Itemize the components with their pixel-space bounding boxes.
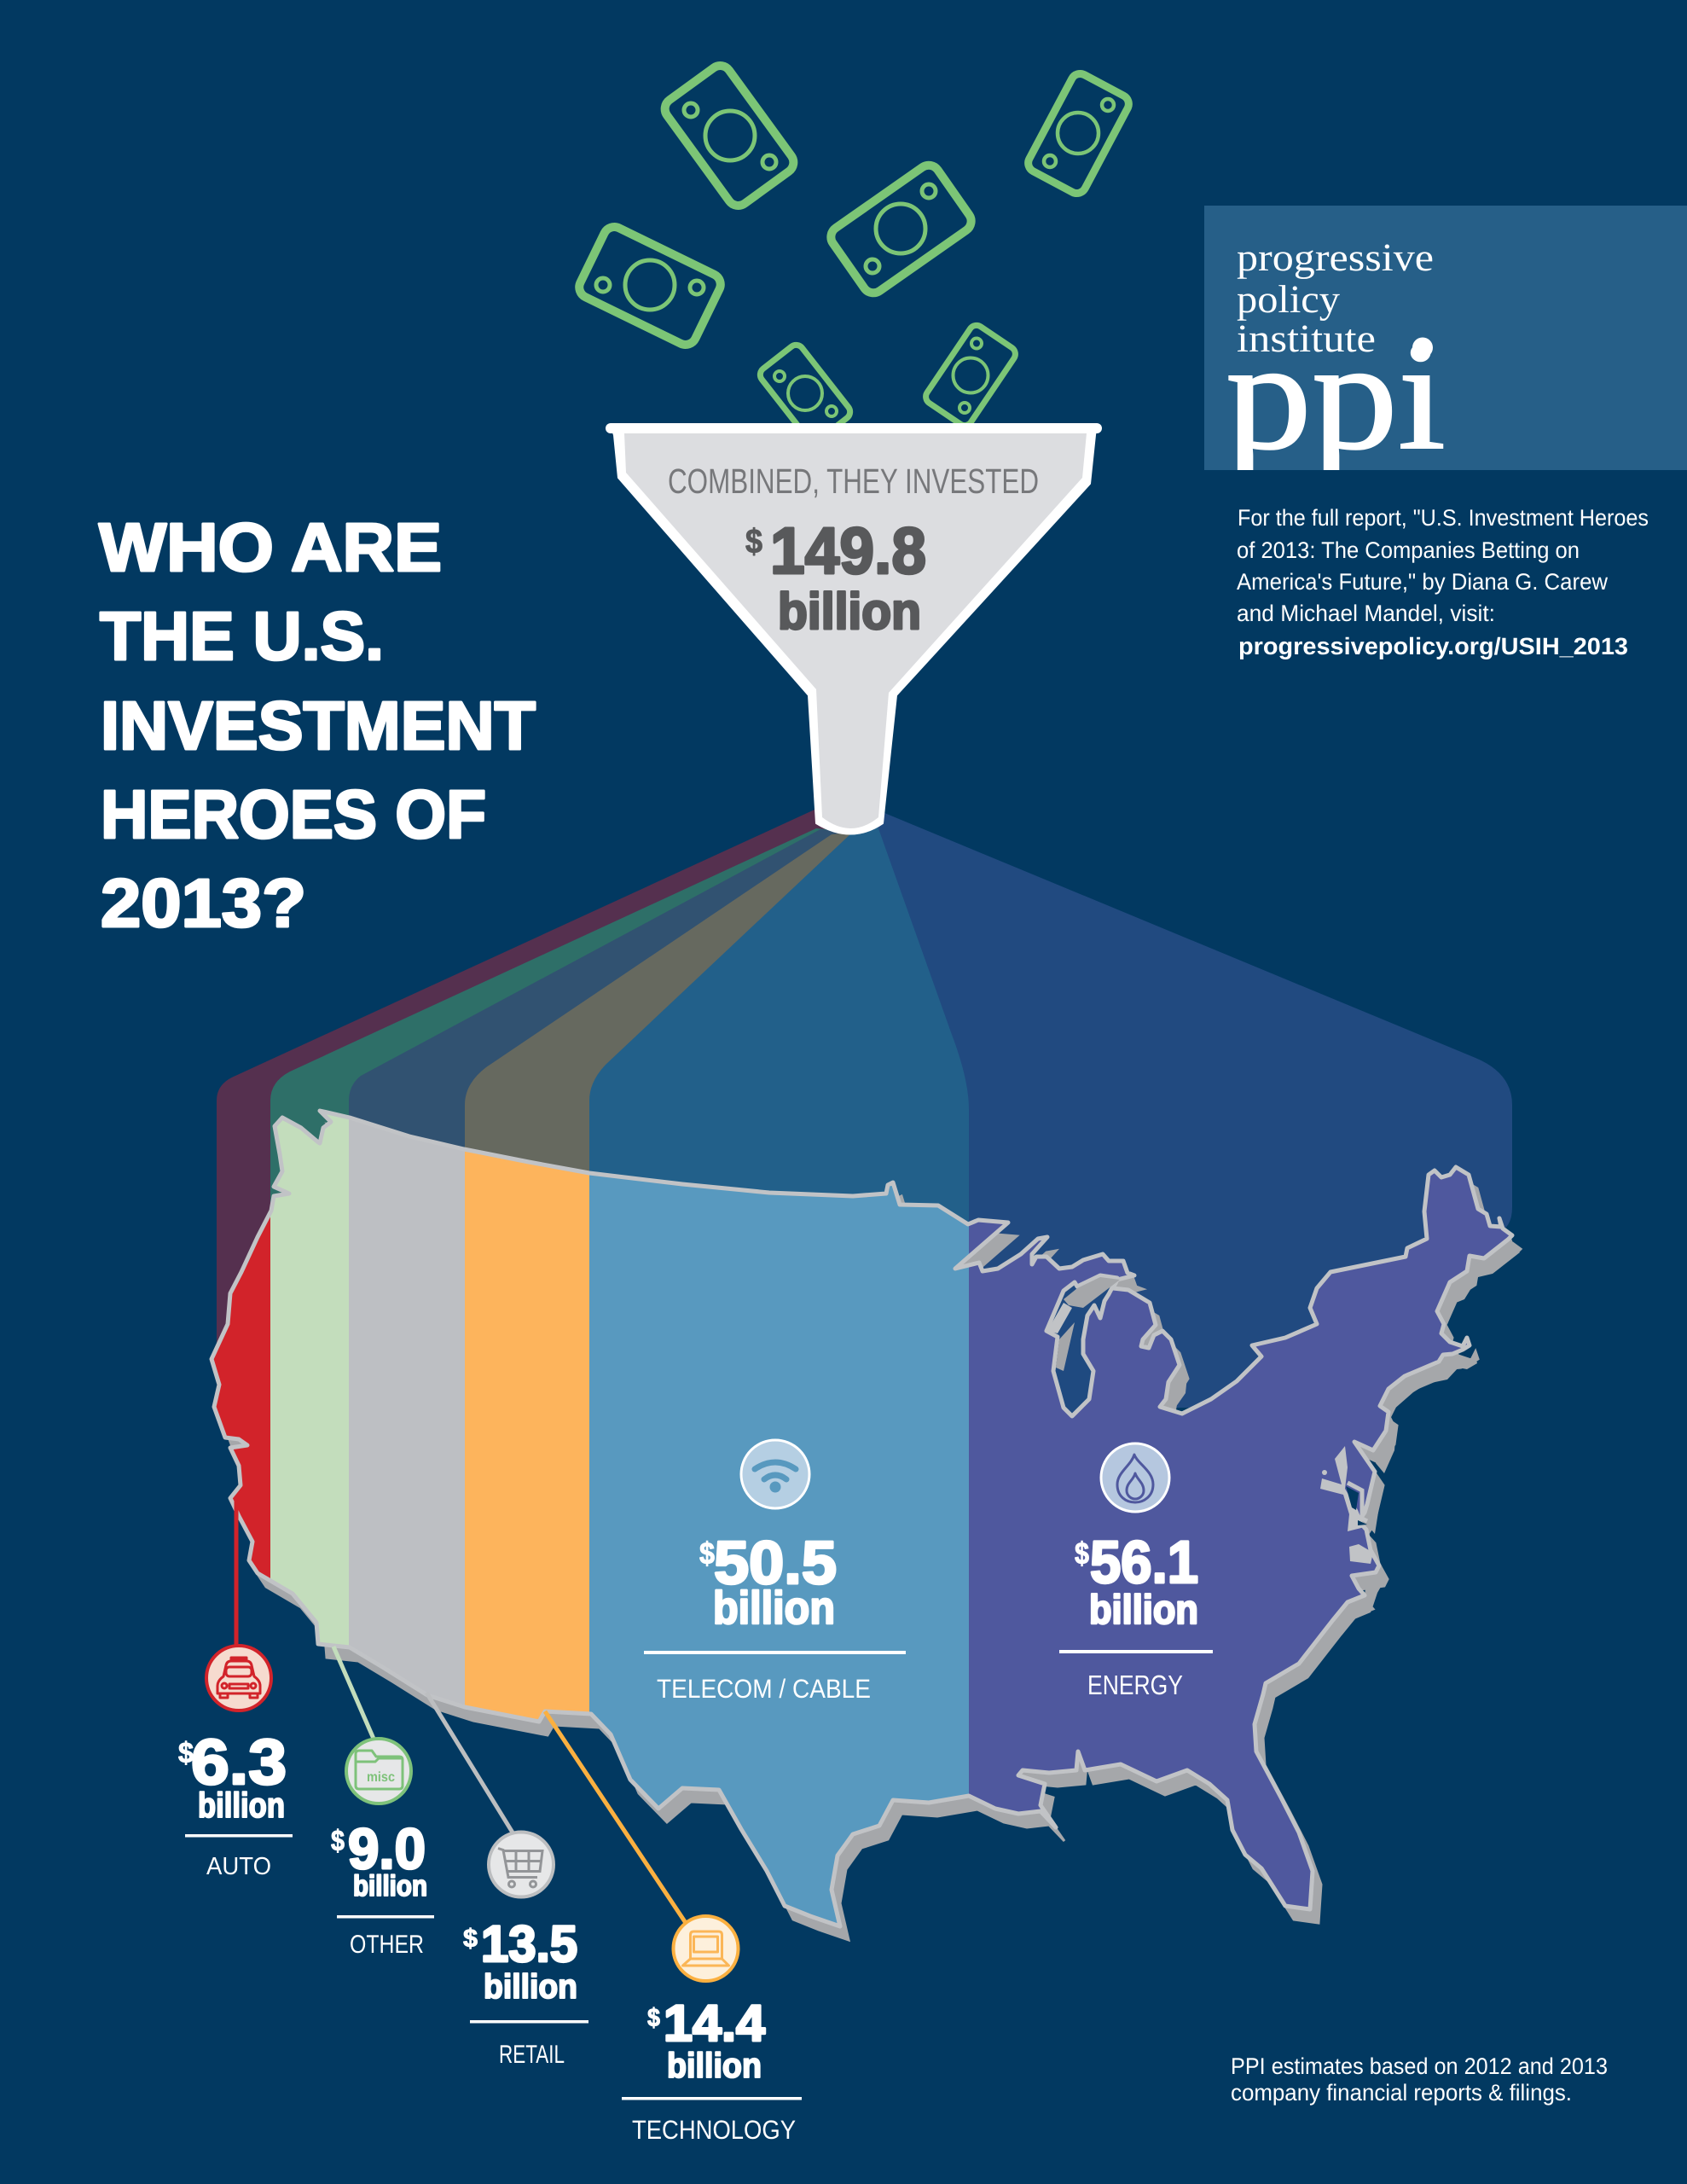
- PPI logo panel: [1204, 206, 1687, 482]
- funnel total: billion: [778, 583, 921, 640]
- leader lines to small sector icons: [236, 1502, 686, 1923]
- shadow: New England: [1437, 1240, 1520, 1324]
- shadow: Delmarva: [1367, 1478, 1382, 1534]
- footnote: PPI estimates based on 2012 and 2013: [1231, 2053, 1608, 2079]
- title: THE U.S.: [100, 598, 384, 674]
- sector: energy: billion: [1089, 1588, 1198, 1633]
- bill 2: [576, 224, 724, 348]
- icon: laptop: [674, 1916, 739, 1981]
- sector: other: [331, 1739, 434, 1959]
- title: [99, 509, 536, 941]
- sector: auto: [178, 1646, 293, 1880]
- logo wordmark: progressive: [1237, 235, 1434, 279]
- title: WHO ARE: [99, 509, 442, 585]
- funnel total: [745, 514, 926, 640]
- Lake Michigan: [1046, 1275, 1120, 1416]
- sector: other: OTHER: [350, 1931, 424, 1959]
- icon: folder: misc: [367, 1770, 395, 1785]
- sector: telecom / cable: billion: [713, 1583, 835, 1634]
- title: HEROES OF: [101, 776, 486, 852]
- telecom value: $: [699, 1536, 715, 1571]
- sector: retail: 13.5: [481, 1915, 577, 1972]
- Chesapeake Bay detail: [1320, 1446, 1373, 1564]
- icon: wifi: [741, 1440, 809, 1508]
- title: 2013?: [101, 865, 306, 941]
- funnel label: COMBINED, THEY INVESTED: [668, 462, 1039, 501]
- sector: technology: TECHNOLOGY: [632, 2115, 796, 2145]
- sector: auto: AUTO: [206, 1853, 271, 1880]
- sector: technology: 14.4: [664, 1995, 766, 2052]
- sector: energy: ENERGY: [1087, 1670, 1183, 1700]
- sector: energy: [1059, 1443, 1213, 1700]
- US map split into sector bands: [213, 1114, 1510, 1923]
- sector: telecom / cable: TELECOM / CABLE: [657, 1674, 871, 1704]
- report reference text: and Michael Mandel, visit:: [1237, 601, 1495, 626]
- US map outline: [212, 1111, 1512, 1926]
- sector: energy: 56.1: [1090, 1529, 1198, 1595]
- sector: telecom / cable: 50.5: [714, 1530, 837, 1597]
- sector: auto: 6.3: [191, 1726, 287, 1798]
- bill 4: [1025, 71, 1132, 196]
- PPI logo panel: institute: [1237, 317, 1376, 360]
- report reference text: of 2013: The Companies Betting on: [1237, 537, 1580, 563]
- retail value: $: [463, 1925, 478, 1953]
- PPI logo panel: policy: [1237, 277, 1340, 321]
- sector: technology: [622, 1916, 802, 2145]
- energy value: $: [1075, 1536, 1089, 1571]
- US map shadow: [220, 1124, 1521, 1940]
- icon: car: [206, 1646, 271, 1711]
- sector: retail: RETAIL: [499, 2041, 565, 2069]
- shadow: Long Island: [1382, 1354, 1477, 1410]
- funnel rim: [611, 423, 1097, 433]
- report reference text: For the full report, "U.S. Investment Heroes: [1238, 505, 1649, 531]
- sector: other: 9.0: [348, 1817, 426, 1881]
- title: INVESTMENT: [101, 688, 536, 764]
- sector: telecom / cable: [644, 1440, 906, 1704]
- bill 1: [661, 61, 797, 210]
- auto value: $: [178, 1737, 194, 1769]
- icon: flame: [1101, 1443, 1169, 1512]
- funnel: [611, 425, 1097, 834]
- funnel interior: [624, 433, 1087, 828]
- shadow: Lake Superior: [957, 1239, 1012, 1269]
- bill 6: [923, 322, 1018, 428]
- other value: $: [331, 1825, 345, 1857]
- report reference text: progressivepolicy.org/USIH_2013: [1238, 633, 1628, 659]
- shadow: Carolinas: [1333, 1574, 1384, 1621]
- technology value: $: [647, 2004, 660, 2032]
- icon: folder: [346, 1739, 411, 1804]
- bands projecting from funnel to map: [217, 810, 1512, 1408]
- sector: auto: billion: [198, 1786, 285, 1825]
- money bills falling into funnel: [576, 61, 1132, 444]
- funnel total: 149.8: [770, 514, 926, 588]
- sector: other: billion: [353, 1870, 427, 1902]
- footnote: company financial reports & filings.: [1231, 2080, 1572, 2106]
- icon: shopping cart: [489, 1833, 554, 1897]
- sector: technology: billion: [667, 2046, 762, 2085]
- footnote: [1231, 2053, 1608, 2106]
- funnel total: $: [745, 523, 762, 561]
- bill 3: [826, 161, 976, 297]
- shadow: Michigan thumb: [1162, 1356, 1187, 1408]
- sector: retail: [463, 1833, 588, 2069]
- bill 5: [757, 341, 853, 423]
- shadow: New Jersey: [1376, 1412, 1396, 1473]
- logo ppi: ppi: [1226, 309, 1446, 482]
- report reference text: [1237, 505, 1649, 659]
- sector: retail: billion: [484, 1968, 577, 2006]
- report reference text: America's Future," by Diana G. Carew: [1237, 569, 1608, 595]
